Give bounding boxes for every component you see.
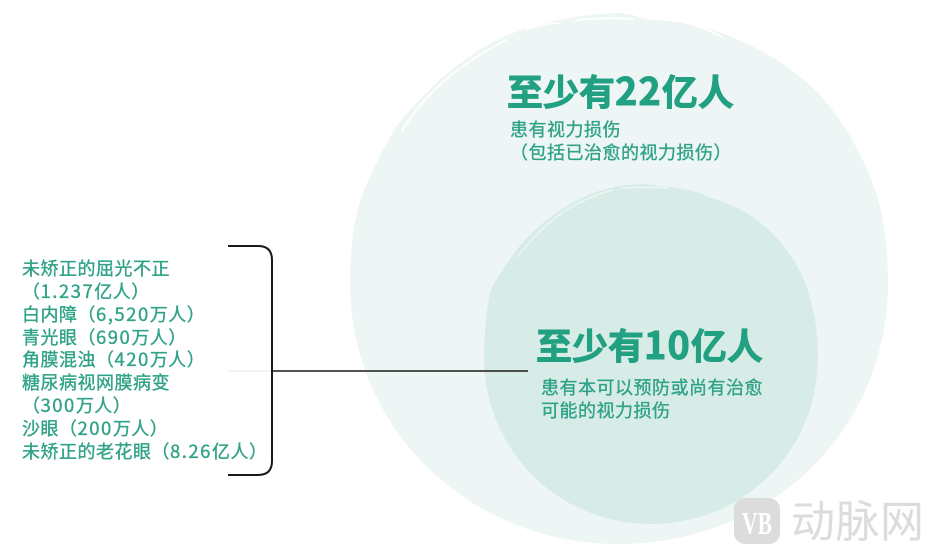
description: 2.2 billion xyxy=(510,116,732,165)
watermark logo xyxy=(734,486,924,550)
outer circle: 22 billion people xyxy=(350,13,888,544)
list of causes xyxy=(22,255,267,464)
list of causes: 糖尿病视网膜病变 xyxy=(22,369,170,395)
description: 2.2 billion: （包括已治愈的视力损伤） xyxy=(510,139,732,165)
inner circle: 1 billion people xyxy=(484,184,818,524)
bracket connecting list to inner circle xyxy=(228,246,528,475)
list of causes: （300万人） xyxy=(22,392,131,418)
icon: VB badge xyxy=(734,498,780,544)
description: 1 billion: 可能的视力损伤 xyxy=(541,397,670,423)
description: 2.2 billion: 患有视力损伤 xyxy=(510,116,621,142)
list of causes: 未矫正的屈光不正 xyxy=(22,255,170,281)
list of causes: 青光眼（690万人） xyxy=(22,324,187,350)
list of causes: 白内障（6,520万人） xyxy=(22,301,205,327)
description: 1 billion: 患有本可以预防或尚有治愈 xyxy=(541,374,763,400)
list of causes: 未矫正的老花眼（8.26亿人） xyxy=(22,438,267,464)
heading: at least 1 billion: 至少有10亿人 xyxy=(536,315,763,370)
description: 1 billion xyxy=(541,374,763,423)
list of causes: 沙眼（200万人） xyxy=(22,415,168,441)
watermark text: 动脉网 xyxy=(791,486,924,550)
list of causes: 角膜混浊（420万人） xyxy=(22,346,205,372)
icon: VB badge: VB xyxy=(742,505,772,541)
list of causes: （1.237亿人） xyxy=(22,278,150,304)
heading: at least 2.2 billion: 至少有22亿人 xyxy=(507,61,734,116)
